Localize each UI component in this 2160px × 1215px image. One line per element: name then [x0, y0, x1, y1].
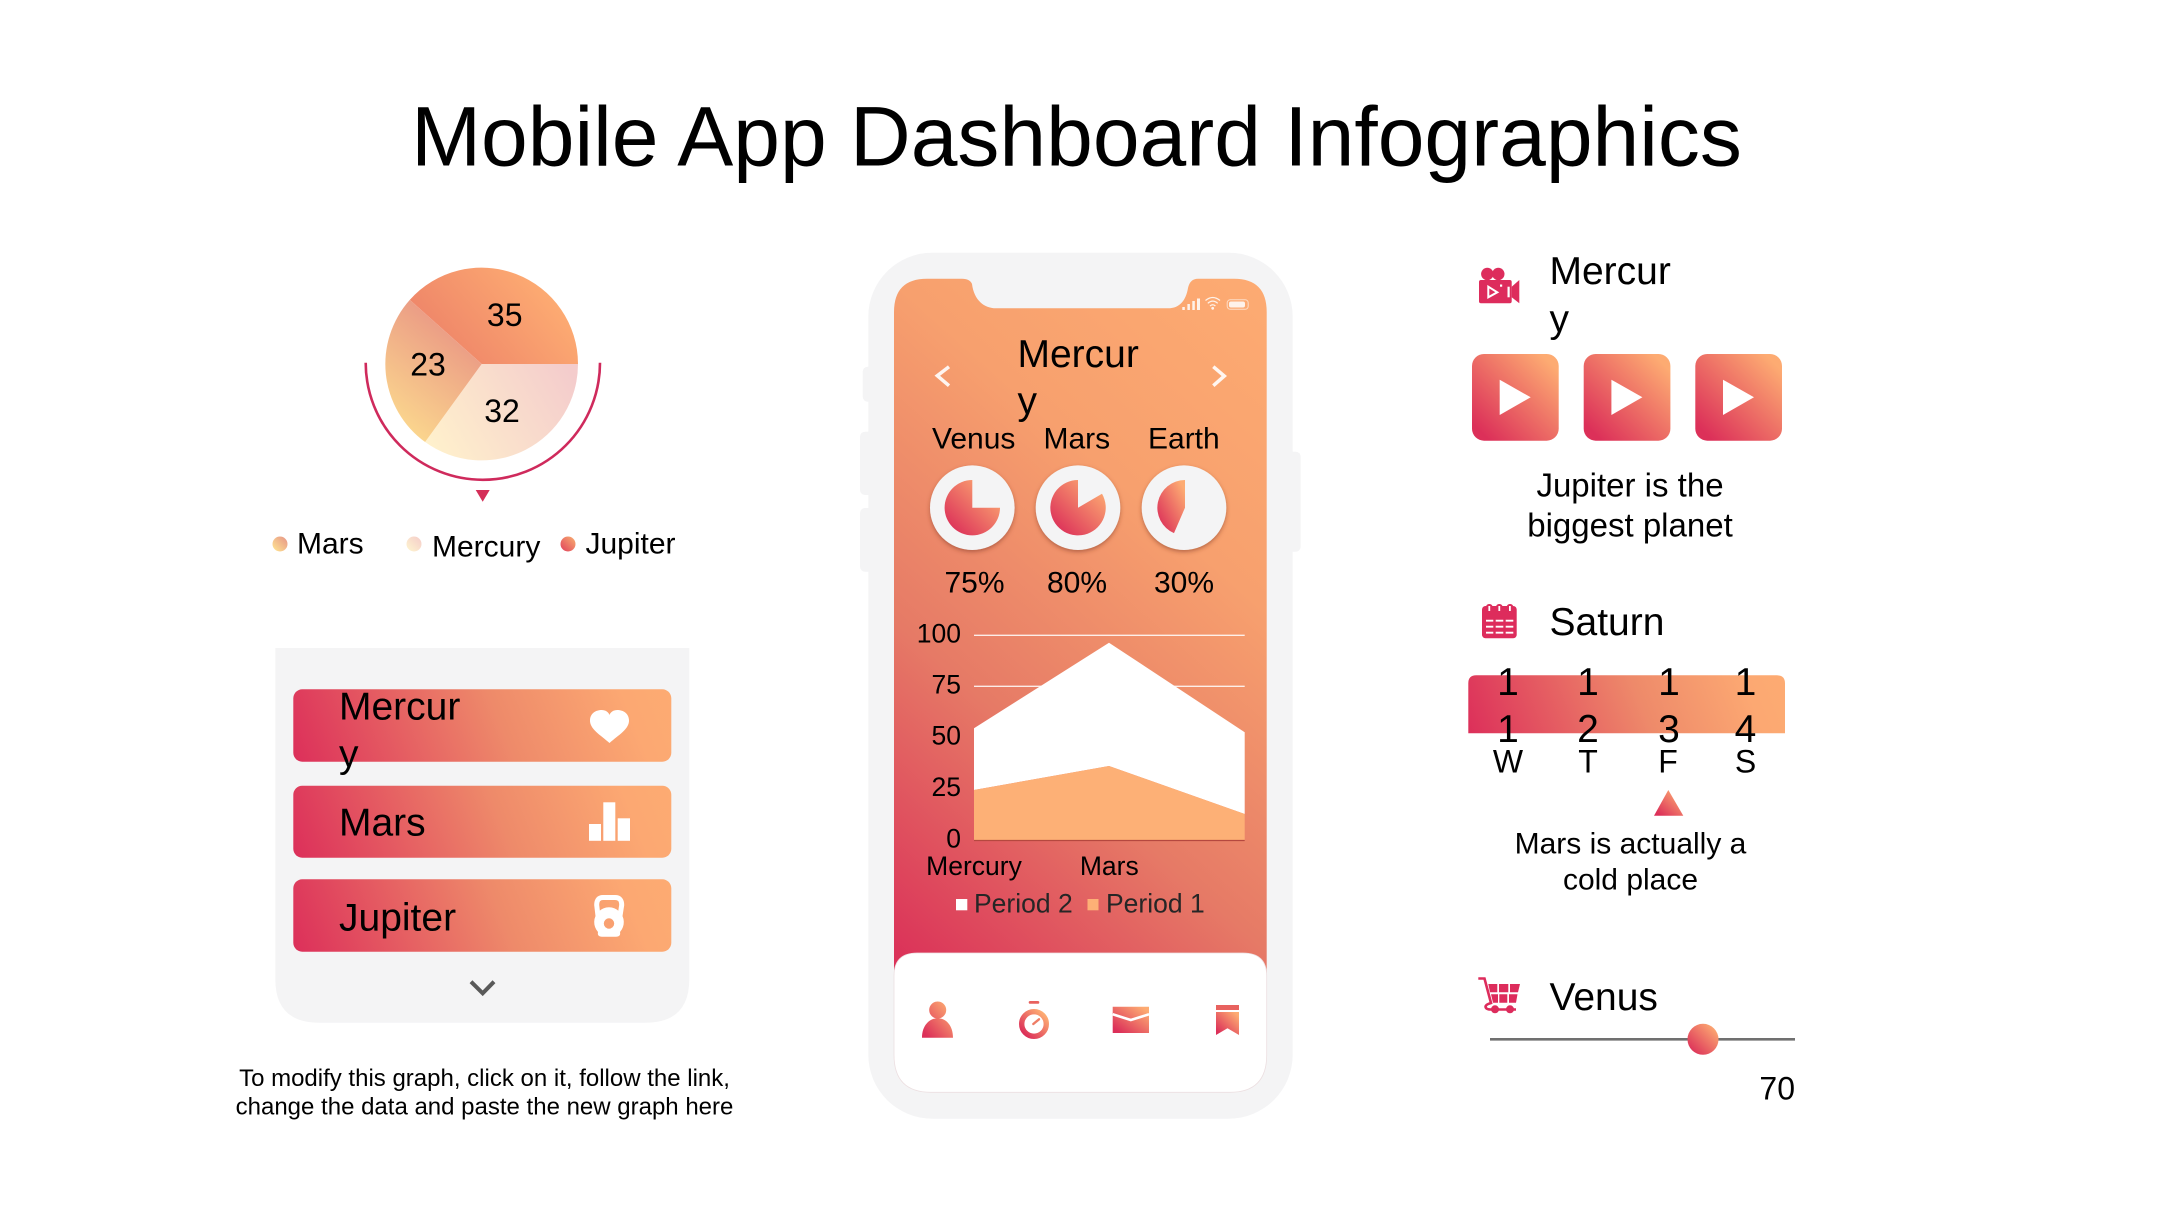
pie slice: 23 — [385, 300, 482, 442]
chevron down — [471, 982, 494, 993]
menu label: Mars: Mars — [339, 802, 426, 844]
heading: Saturn: Saturn — [1550, 601, 1664, 644]
y axis labels: 25 — [932, 772, 961, 802]
value 32: 32 — [484, 393, 520, 429]
dates: 2 — [1577, 708, 1599, 751]
arc pointer triangle — [476, 490, 490, 502]
menu label: Jupiter: Jupiter — [339, 896, 456, 940]
dates: 4 — [1735, 708, 1756, 751]
legend dot: Mercury — [406, 536, 422, 552]
menu label: Mercury: y — [339, 733, 359, 776]
chart baseline — [974, 840, 1245, 842]
gauge label: Earth: Earth — [1148, 422, 1220, 456]
weekdays: S — [1735, 744, 1756, 780]
x axis label: Mars: Mars — [1080, 851, 1139, 881]
slider value: 70 — [1759, 1070, 1795, 1106]
chart legend: Period 1 — [1106, 888, 1205, 918]
icon: bar chart — [589, 802, 630, 841]
gauge disc — [1036, 465, 1120, 550]
legend dot: Mars — [272, 536, 288, 552]
icon: kettlebell — [594, 898, 624, 937]
weekdays: W — [1493, 744, 1524, 780]
slider knob — [1688, 1024, 1718, 1055]
area: period 2 — [974, 643, 1245, 814]
gauge value: 80% — [1047, 567, 1107, 600]
weekdays: T — [1578, 744, 1598, 780]
title: Mobile App Dashboard Infographics — [411, 90, 1742, 184]
arc under pie — [366, 363, 600, 480]
chevron left — [937, 367, 949, 386]
icon: envelope — [1113, 1007, 1149, 1033]
y axis labels: 50 — [932, 720, 961, 750]
gauge value: 75% — [944, 567, 1005, 600]
heading: Venus: Venus — [1550, 976, 1658, 1019]
note text: change the data and paste the new graph here — [236, 1094, 733, 1120]
icon: person — [922, 1002, 953, 1038]
gauge value: 30% — [1154, 567, 1214, 600]
icon: heart — [590, 710, 629, 743]
menu bar: Mercury — [293, 689, 671, 762]
phone screen — [894, 279, 1267, 1000]
slider track — [1490, 1038, 1795, 1041]
video section — [1472, 250, 1782, 544]
area chart — [917, 618, 1245, 918]
gauge column: Venus — [930, 422, 1015, 600]
chart legend: Period 2 — [974, 888, 1073, 918]
phone mockup — [860, 253, 1301, 1119]
value 35: 35 — [487, 297, 522, 333]
menu label: Mercury: Mercur — [339, 686, 460, 728]
panel: menu list — [275, 648, 689, 1023]
icon: stopwatch — [1022, 1001, 1046, 1036]
slider section — [1478, 976, 1795, 1106]
icon: calendar — [1482, 604, 1517, 638]
bottom nav panel — [894, 953, 1267, 1092]
gauge column: Earth — [1142, 422, 1226, 600]
pie slice: 32 — [425, 364, 578, 460]
screen heading: y — [1018, 380, 1038, 423]
legend label: Jupiter: Jupiter — [586, 528, 676, 560]
gauge label: Venus: Venus — [932, 422, 1015, 456]
heading: Mercury: Mercur — [1550, 250, 1671, 293]
legend label: Mars: Mars — [297, 528, 364, 560]
dates: 1 — [1735, 661, 1756, 704]
dates: 3 — [1658, 708, 1680, 751]
menu bar: Mars — [293, 786, 671, 858]
y axis labels: 0 — [946, 824, 961, 854]
phone side buttons — [860, 367, 1301, 572]
icon: bookmark — [1216, 1005, 1239, 1035]
x axis label: Mercury: Mercury — [926, 851, 1023, 881]
menu panel background — [275, 648, 689, 1023]
menu bar: Jupiter — [293, 879, 671, 952]
calendar section — [1468, 601, 1785, 896]
icon: video camera — [1479, 268, 1519, 303]
value 23: 23 — [410, 347, 446, 383]
date band — [1468, 675, 1785, 733]
gauge disc — [1142, 465, 1226, 550]
gauge pie 30% — [1157, 480, 1185, 533]
pointer triangle — [1654, 790, 1683, 816]
caption: Mars: cold place — [1563, 864, 1698, 896]
dates: 1 — [1497, 661, 1519, 704]
gauge pie 75% — [945, 480, 1000, 535]
caption: Jupiter: biggest planet — [1527, 506, 1733, 544]
dates: 1 — [1658, 661, 1680, 704]
play button 3 — [1695, 354, 1782, 441]
phone body — [868, 253, 1293, 1119]
dates — [1497, 661, 1756, 751]
weekdays — [1493, 744, 1756, 780]
play button 1 — [1472, 354, 1559, 441]
gauge pie 80% — [1050, 480, 1106, 535]
chevron right — [1213, 367, 1224, 386]
legend label: Mercury: Mercury — [432, 530, 540, 564]
weekdays: F — [1658, 744, 1678, 780]
heading: Mercury: y — [1550, 298, 1570, 341]
gauge label: Mars: Mars — [1044, 422, 1110, 456]
area: period 1 — [974, 766, 1245, 840]
pie legend — [272, 528, 676, 564]
pie slice: 35 — [410, 268, 578, 364]
status bar icons — [1182, 298, 1248, 310]
dates: 1 — [1497, 708, 1519, 751]
screen heading: Mercur — [1018, 333, 1139, 376]
icon: shopping cart — [1478, 978, 1520, 1013]
note text: To modify this graph, click on it, follow the link, — [239, 1065, 730, 1092]
play button 2 — [1584, 354, 1670, 441]
y axis labels: 75 — [932, 670, 961, 700]
gridlines — [974, 635, 1245, 686]
gauge column: Mars — [1036, 422, 1120, 600]
dates: 1 — [1577, 661, 1599, 704]
y axis labels: 100 — [917, 618, 961, 648]
gauge disc — [930, 465, 1015, 550]
caption: Mars: Mars is actually a — [1515, 828, 1747, 860]
y axis labels — [917, 618, 961, 854]
caption: Jupiter: Jupiter is the — [1536, 466, 1724, 504]
pie chart panel — [366, 268, 600, 502]
chart legend — [956, 888, 1205, 918]
legend dot: Jupiter — [560, 536, 576, 552]
